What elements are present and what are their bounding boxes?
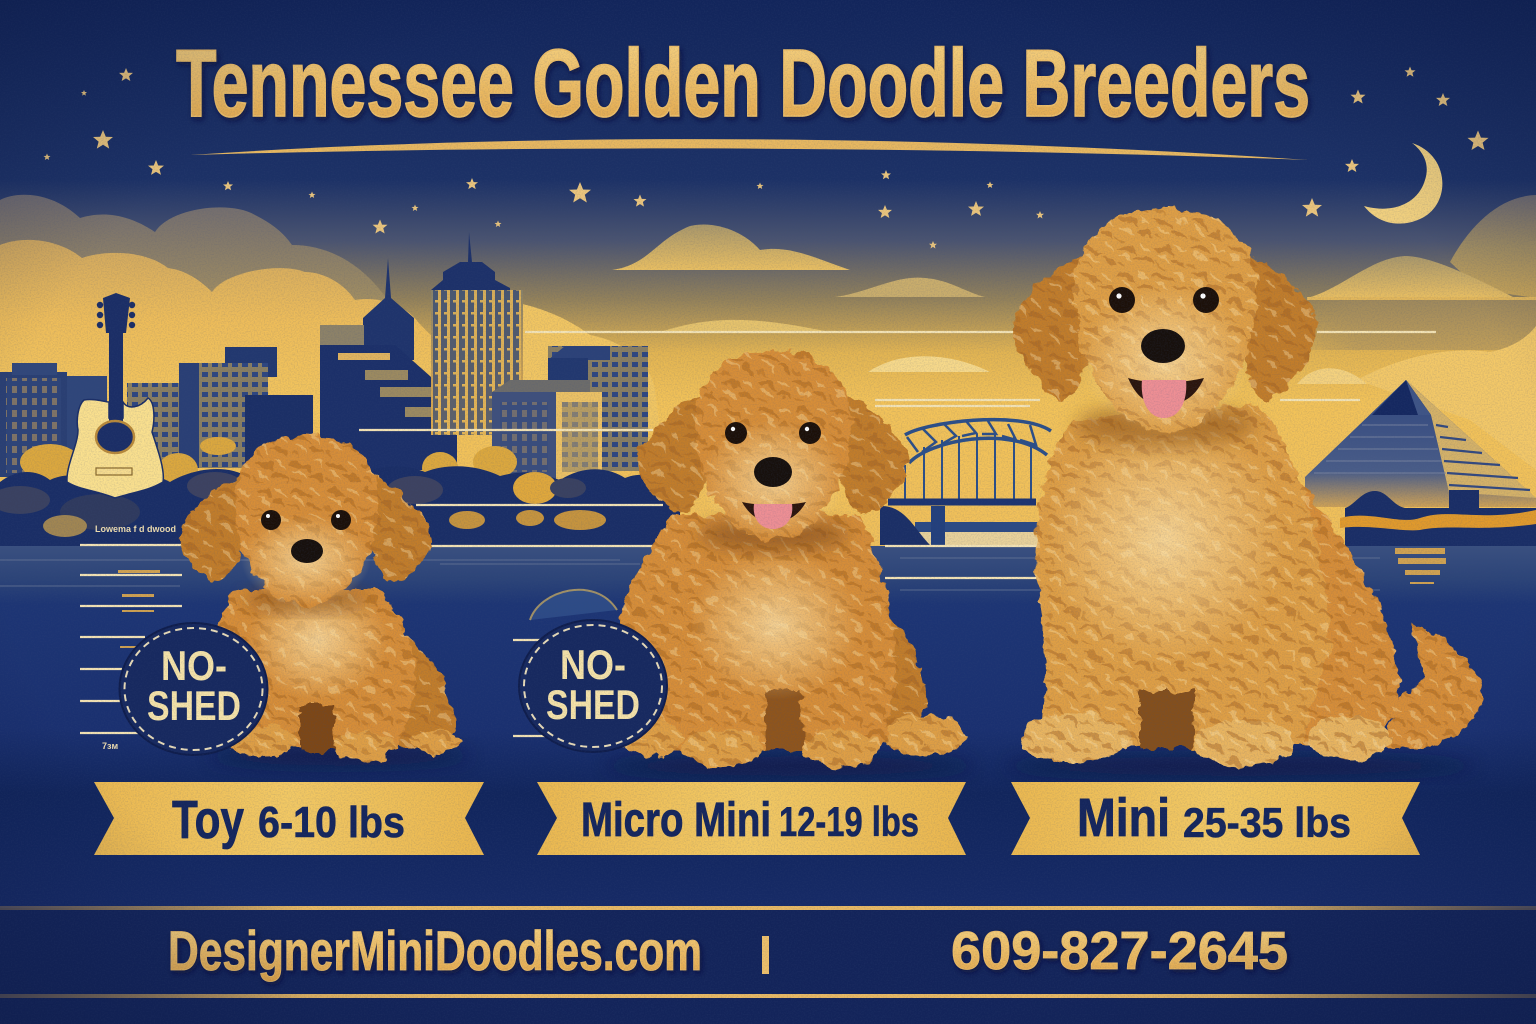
- chest highlight: [248, 580, 388, 700]
- banner: micro mini: Micro Mini: [581, 794, 771, 847]
- far river bank with trees: [1340, 490, 1536, 547]
- badge: no-shed micro mini: SHED: [546, 681, 640, 728]
- dog: micro mini: [619, 350, 967, 767]
- ears: [1013, 250, 1317, 400]
- ears: [637, 392, 909, 513]
- bridge: [888, 420, 1051, 502]
- neck shadow: [698, 519, 848, 551]
- tail: [1385, 624, 1483, 748]
- face highlight: [1080, 285, 1250, 435]
- body: [1021, 405, 1400, 767]
- far water streaks: [0, 558, 1380, 590]
- badge: no-shed micro mini: [519, 620, 667, 752]
- face highlight: [241, 515, 371, 605]
- badge: no-shed micro mini: NO-: [560, 641, 626, 688]
- banner: mini: [1011, 782, 1420, 855]
- neck shadow: [244, 588, 368, 612]
- badge: no-shed toy: SHED: [147, 682, 241, 729]
- title underline swoosh: [190, 139, 1308, 160]
- face highlight: [701, 420, 845, 540]
- badge: no-shed toy: NO-: [161, 642, 227, 689]
- trees along river: [0, 437, 680, 546]
- clouds: [0, 195, 1536, 470]
- icon: crescent moon: [1364, 143, 1442, 224]
- footer band: [0, 906, 1536, 1024]
- bridge pier: [931, 506, 945, 548]
- city skyline: [0, 232, 648, 480]
- background sky: [0, 0, 1536, 560]
- head: [234, 435, 378, 605]
- eyes: [725, 422, 821, 444]
- banner: mini: Mini: [1077, 788, 1170, 848]
- banner: toy: Toy: [172, 790, 244, 850]
- footer phone: 609-827-2645: [951, 921, 1288, 981]
- icon: guitar: [67, 293, 163, 498]
- eye highlights: [731, 427, 809, 431]
- chest highlight: [690, 550, 860, 700]
- water reflections: [118, 548, 1446, 648]
- nose: [1141, 329, 1185, 363]
- eyes: [1109, 287, 1219, 313]
- dog: toy: [180, 435, 462, 761]
- small caption bottom left: 7ᴈᴍ: [102, 741, 118, 751]
- dog: mini: [1013, 208, 1483, 767]
- pyramid landmark: [1305, 380, 1536, 507]
- wooded bank under bridge: [880, 506, 930, 545]
- tongue: [754, 504, 792, 529]
- banner: mini: 25-35 lbs: [1183, 799, 1351, 846]
- eye highlights: [1116, 293, 1206, 299]
- eyes: [261, 510, 351, 530]
- banner: toy: 6-10 lbs: [258, 798, 405, 847]
- footer website: DesignerMiniDoodles.com: [168, 919, 702, 982]
- head: [694, 350, 852, 540]
- far water band under bridge: [915, 522, 1040, 546]
- footer divider: [762, 936, 769, 974]
- small caption top left: Lowema f d dwood: [95, 524, 176, 534]
- head: [1073, 208, 1257, 432]
- mouth: [1128, 378, 1204, 405]
- nose: [754, 457, 792, 487]
- eye highlights: [266, 514, 340, 518]
- nose: [291, 539, 323, 563]
- badge: no-shed toy: [120, 623, 268, 755]
- dog shadows: [210, 746, 1475, 776]
- mouth: [742, 502, 806, 522]
- banner: toy: [94, 782, 484, 855]
- banner: micro mini: [537, 782, 966, 855]
- horizontal chart lines: [80, 332, 1436, 736]
- river water: [0, 546, 1536, 910]
- banner: micro mini: 12-19 lbs: [779, 798, 919, 845]
- tongue: [1142, 380, 1186, 418]
- stars: [44, 66, 1488, 248]
- chest highlight: [1045, 415, 1285, 665]
- neck shadow: [1075, 403, 1255, 447]
- ears: [180, 472, 432, 582]
- blue arc behind badge: [530, 590, 617, 620]
